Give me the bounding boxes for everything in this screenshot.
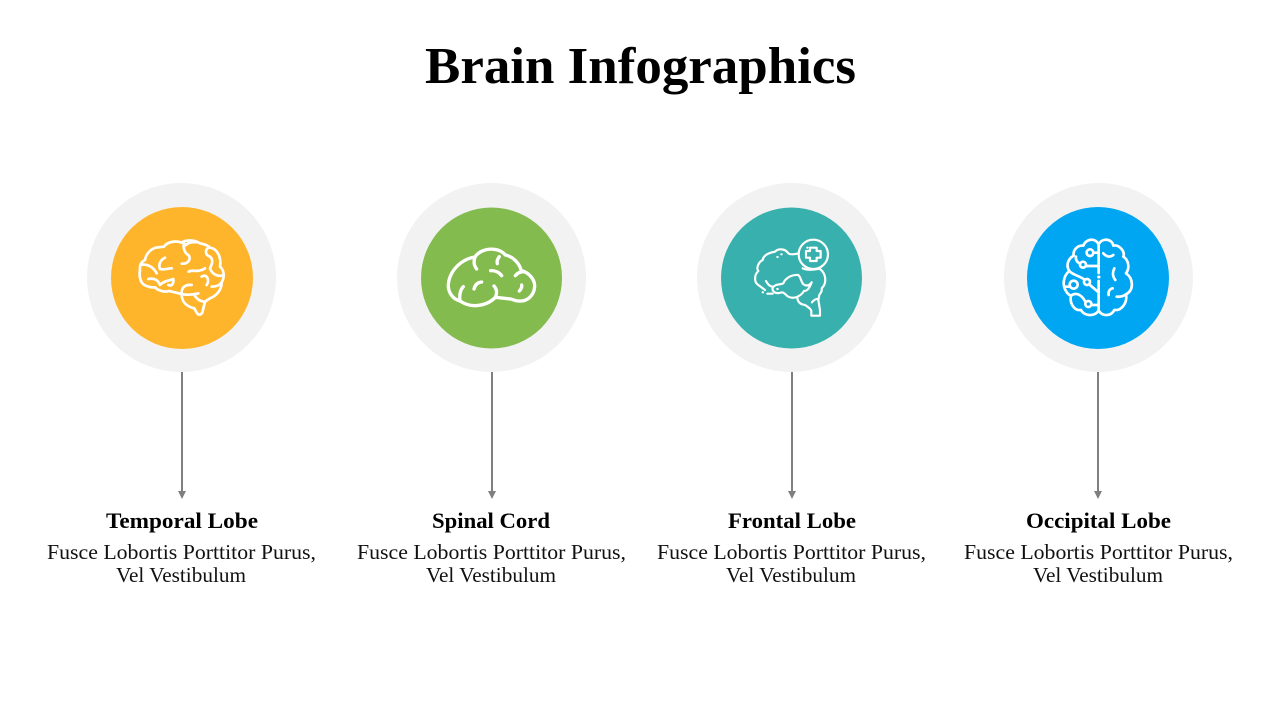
heading: Occipital Lobe <box>1026 508 1171 533</box>
panel: occipital lobe <box>964 183 1233 587</box>
description: Vel Vestibulum <box>426 563 556 587</box>
arrow <box>1094 372 1102 499</box>
arrow <box>788 372 796 499</box>
arrow <box>178 372 186 499</box>
title: Brain Infographics <box>425 38 856 95</box>
outer ring <box>87 183 276 372</box>
description: Fusce Lobortis Porttitor Purus, <box>357 540 626 564</box>
description: Vel Vestibulum <box>726 563 856 587</box>
green circle <box>421 208 562 348</box>
orange circle <box>111 207 253 349</box>
description <box>964 540 1233 587</box>
heading: Temporal Lobe <box>106 508 258 533</box>
description <box>657 540 926 587</box>
teal circle <box>721 208 862 348</box>
description <box>47 540 316 587</box>
description <box>357 540 626 587</box>
description: Fusce Lobortis Porttitor Purus, <box>964 540 1233 564</box>
icon: brain outline <box>448 249 535 306</box>
arrow <box>488 372 496 499</box>
outer ring <box>397 183 586 372</box>
description: Vel Vestibulum <box>116 563 246 587</box>
panel: frontal lobe <box>657 183 926 587</box>
description: Fusce Lobortis Porttitor Purus, <box>657 540 926 564</box>
heading: Spinal Cord <box>432 508 550 533</box>
icon: brain with circuit nodes <box>1064 240 1132 315</box>
icon: brain side view <box>140 240 224 315</box>
outer ring <box>697 183 886 372</box>
blue circle <box>1027 207 1169 349</box>
description: Vel Vestibulum <box>1033 563 1163 587</box>
outer ring <box>1004 183 1193 372</box>
icon: brain with medical cross <box>755 240 828 316</box>
heading: Frontal Lobe <box>728 508 856 533</box>
panel: temporal lobe <box>47 183 316 587</box>
panel: spinal cord <box>357 183 626 587</box>
description: Fusce Lobortis Porttitor Purus, <box>47 540 316 564</box>
